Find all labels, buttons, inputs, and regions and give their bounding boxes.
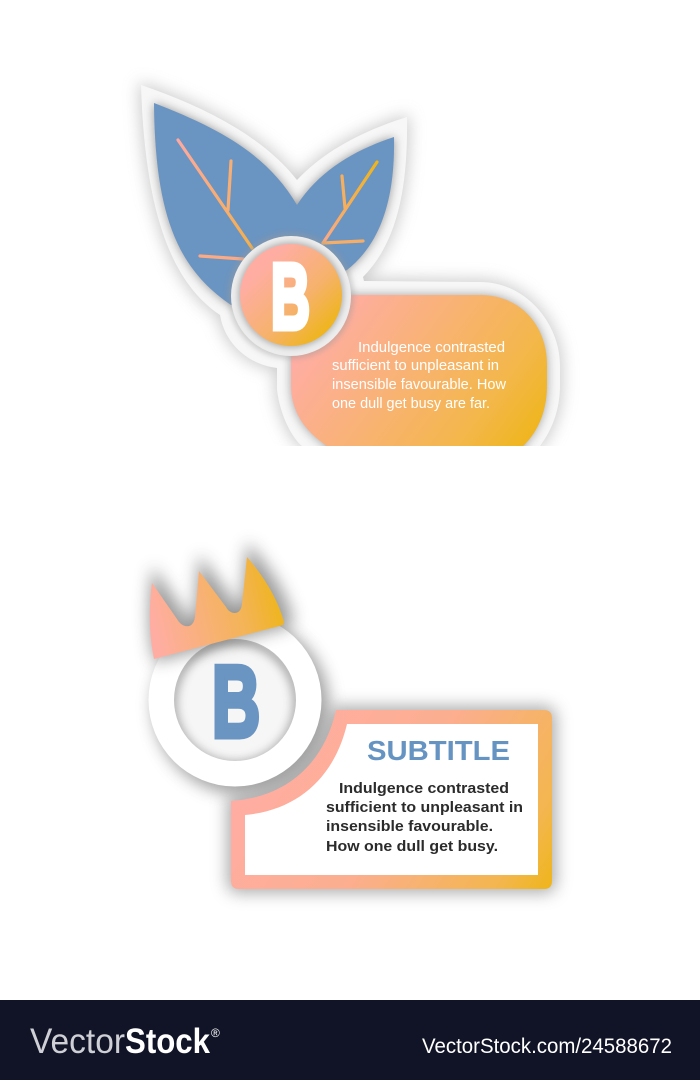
body text dark: sufficient to unpleasant in — [326, 800, 523, 816]
panel: leaf badge with text — [141, 85, 560, 470]
body text dark: insensible favourable. — [326, 819, 493, 835]
subtitle: SUBTITLE — [367, 735, 510, 766]
circle badge ring inner shade — [238, 242, 344, 348]
recessed well — [172, 639, 298, 766]
leaf veins — [178, 140, 377, 259]
body text white: one dull get busy are far. — [332, 396, 490, 412]
letter B white: B — [271, 245, 310, 349]
white text box — [245, 724, 538, 875]
footer logo: Stock — [125, 1022, 210, 1061]
outer paper shadow — [141, 85, 560, 446]
body text dark: Indulgence contrasted — [339, 781, 509, 797]
footer bar — [0, 1000, 700, 1080]
crown shadow — [154, 554, 288, 656]
frame shadow — [231, 710, 552, 889]
crown — [150, 557, 284, 659]
body text dark: How one dull get busy. — [326, 839, 498, 855]
body text white: sufficient to unpleasant in — [332, 358, 499, 374]
body text white — [332, 340, 507, 412]
footer id: VectorStock.com/24588672 — [422, 1035, 672, 1058]
gradient frame — [231, 710, 552, 889]
leaves — [154, 103, 394, 305]
footer logo: Vector — [30, 1022, 125, 1061]
circle badge fill — [240, 244, 342, 346]
body text dark — [326, 781, 523, 855]
footer logo: ® — [211, 1026, 220, 1040]
footer logo — [30, 1022, 220, 1061]
circle badge ring — [231, 236, 351, 356]
letter B blue: B — [212, 647, 260, 759]
body text white: insensible favourable. How — [332, 377, 507, 393]
white ring — [148, 614, 322, 786]
circle badge shadow — [228, 233, 354, 359]
body text white: Indulgence contrasted — [358, 340, 505, 356]
ring shadow — [153, 618, 329, 794]
panel: crown badge with subtitle — [148, 554, 552, 889]
orange text panel — [291, 295, 547, 446]
outer paper layer — [141, 85, 560, 446]
recess shadows — [154, 103, 547, 470]
